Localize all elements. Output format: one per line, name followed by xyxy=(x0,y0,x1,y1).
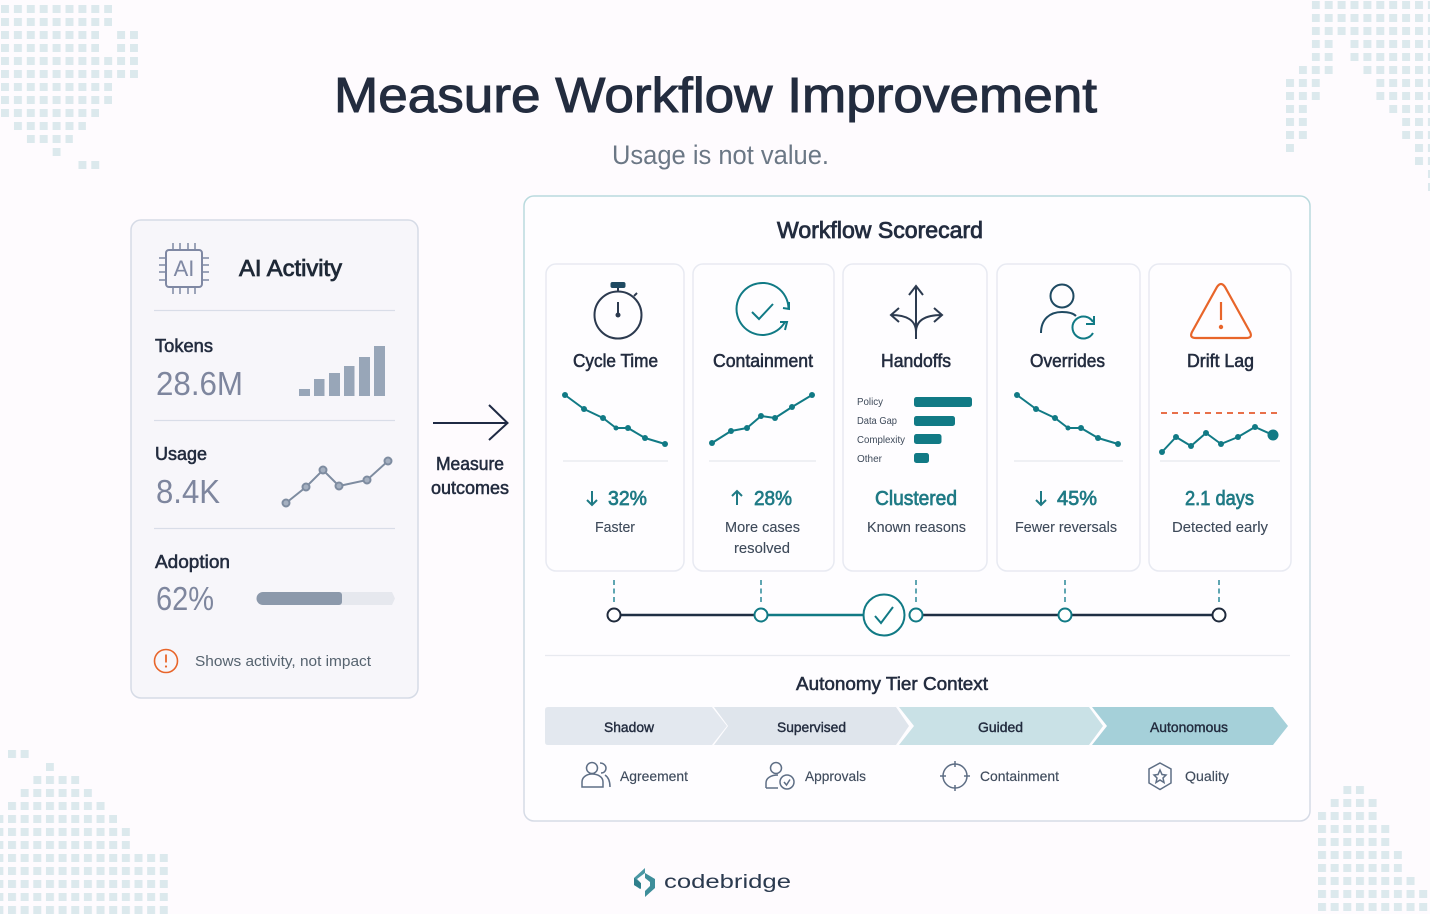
metric: 28%: 28% xyxy=(754,488,792,510)
tier: Guided: Guided xyxy=(978,719,1023,735)
icon: circular check xyxy=(737,283,789,335)
criterion: Approvals xyxy=(766,762,866,789)
criterion: Agreement xyxy=(582,762,688,787)
tier: Shadow xyxy=(545,707,727,745)
criterion: Containment xyxy=(940,761,1059,791)
icon: people xyxy=(582,762,610,787)
card: Drift Lag xyxy=(1149,264,1291,571)
icon: person with refresh xyxy=(1041,284,1094,338)
card: Handoffs xyxy=(843,264,987,571)
metric: adoption: Adoption xyxy=(155,552,230,572)
icon: shield star xyxy=(1149,763,1171,790)
tier heading: Autonomy Tier Context xyxy=(796,674,988,694)
bar chart: handoff reasons: Other xyxy=(857,454,883,465)
metric: 32% xyxy=(587,488,647,510)
line chart: cycle time xyxy=(562,392,668,447)
decorative dots: top left xyxy=(1,5,138,169)
metric: tokens xyxy=(155,336,385,402)
metric: 28% xyxy=(732,488,792,510)
icon: stopwatch xyxy=(594,283,642,338)
icon: warning triangle xyxy=(1191,284,1251,338)
metric: tokens: 28.6M xyxy=(156,365,243,402)
title: Measure Workflow Improvement xyxy=(334,69,1097,123)
criterion: Approvals: Approvals xyxy=(805,768,866,784)
line chart: drift lag xyxy=(1159,413,1280,455)
card: Handoffs: Handoffs xyxy=(881,351,951,371)
icon: check milestone xyxy=(864,594,904,636)
metric: adoption: 62% xyxy=(156,580,214,617)
timeline xyxy=(608,580,1226,636)
line chart: containment xyxy=(709,392,815,446)
bar chart: tokens xyxy=(299,346,385,396)
card: Handoffs: Clustered xyxy=(875,488,957,510)
scorecard heading: Workflow Scorecard xyxy=(777,217,983,243)
card: Overrides xyxy=(997,264,1140,571)
panel heading: AI Activity xyxy=(239,255,343,281)
tier: Guided xyxy=(899,707,1103,745)
bar chart: handoff reasons xyxy=(857,397,972,465)
card: Overrides: Overrides xyxy=(1030,351,1105,371)
card: Containment xyxy=(693,264,834,571)
icon: target xyxy=(940,761,970,791)
metric: adoption xyxy=(155,552,395,617)
icon: branching arrows xyxy=(891,286,942,339)
arrow: measure outcomes: Measure xyxy=(436,454,504,474)
card: Containment: Containment xyxy=(713,351,813,371)
icon: person with check xyxy=(766,762,794,789)
icon: AI chip xyxy=(159,243,209,294)
card: Drift Lag: 2.1 days xyxy=(1185,488,1254,510)
criterion: Quality xyxy=(1149,763,1229,790)
tier: Shadow: Shadow xyxy=(604,719,655,735)
tier: Autonomous xyxy=(1092,707,1288,745)
tier: Supervised xyxy=(714,707,909,745)
card: Handoffs: Known reasons xyxy=(867,519,966,536)
callout: shows activity xyxy=(154,650,371,672)
decorative dots: top right xyxy=(1286,1,1430,191)
icon: AI chip: AI xyxy=(174,256,194,281)
card: Cycle Time xyxy=(546,264,684,571)
criterion: Quality: Quality xyxy=(1185,768,1229,784)
metric: usage: 8.4K xyxy=(156,473,220,510)
arrow: measure outcomes: outcomes xyxy=(431,478,509,498)
callout: shows activity: Shows activity, not impact xyxy=(195,654,371,670)
card: Drift Lag: Detected early xyxy=(1172,519,1268,536)
tier: Autonomous: Autonomous xyxy=(1150,719,1228,735)
bar chart: handoff reasons: Complexity xyxy=(857,435,905,446)
card: Drift Lag: Drift Lag xyxy=(1187,351,1254,371)
bar chart: handoff reasons: Data Gap xyxy=(857,416,897,427)
subtitle: Usage is not value. xyxy=(612,140,829,170)
criterion: Containment: Containment xyxy=(980,768,1059,784)
decorative dots: bottom left xyxy=(0,750,168,914)
metric: 45%: 45% xyxy=(1057,488,1097,510)
metric: tokens: Tokens xyxy=(155,336,213,356)
metric: 45% xyxy=(1036,488,1097,510)
metric: usage xyxy=(155,444,392,510)
panel: AI Activity xyxy=(131,220,418,698)
progress bar: adoption xyxy=(256,592,395,605)
card: Cycle Time: Cycle Time xyxy=(573,351,658,371)
metric: usage: Usage xyxy=(155,444,207,464)
arrow: measure outcomes xyxy=(431,405,509,498)
line chart: overrides xyxy=(1014,392,1121,447)
card: Containment: resolved xyxy=(734,540,790,557)
criterion: Agreement: Agreement xyxy=(620,768,688,784)
decorative dots: bottom right xyxy=(1318,786,1428,911)
metric: 32%: 32% xyxy=(608,488,647,510)
tier chevrons xyxy=(545,707,1288,745)
card: Cycle Time: Faster xyxy=(595,519,635,536)
line chart: usage xyxy=(282,458,392,506)
logo: codebridge: codebridge xyxy=(664,872,791,893)
bar chart: handoff reasons: Policy xyxy=(857,397,883,408)
logo: codebridge xyxy=(634,868,791,897)
panel: Workflow Scorecard xyxy=(524,196,1310,821)
card: Overrides: Fewer reversals xyxy=(1015,519,1117,536)
card: Containment: More cases xyxy=(725,519,800,536)
tier: Supervised: Supervised xyxy=(777,719,846,735)
